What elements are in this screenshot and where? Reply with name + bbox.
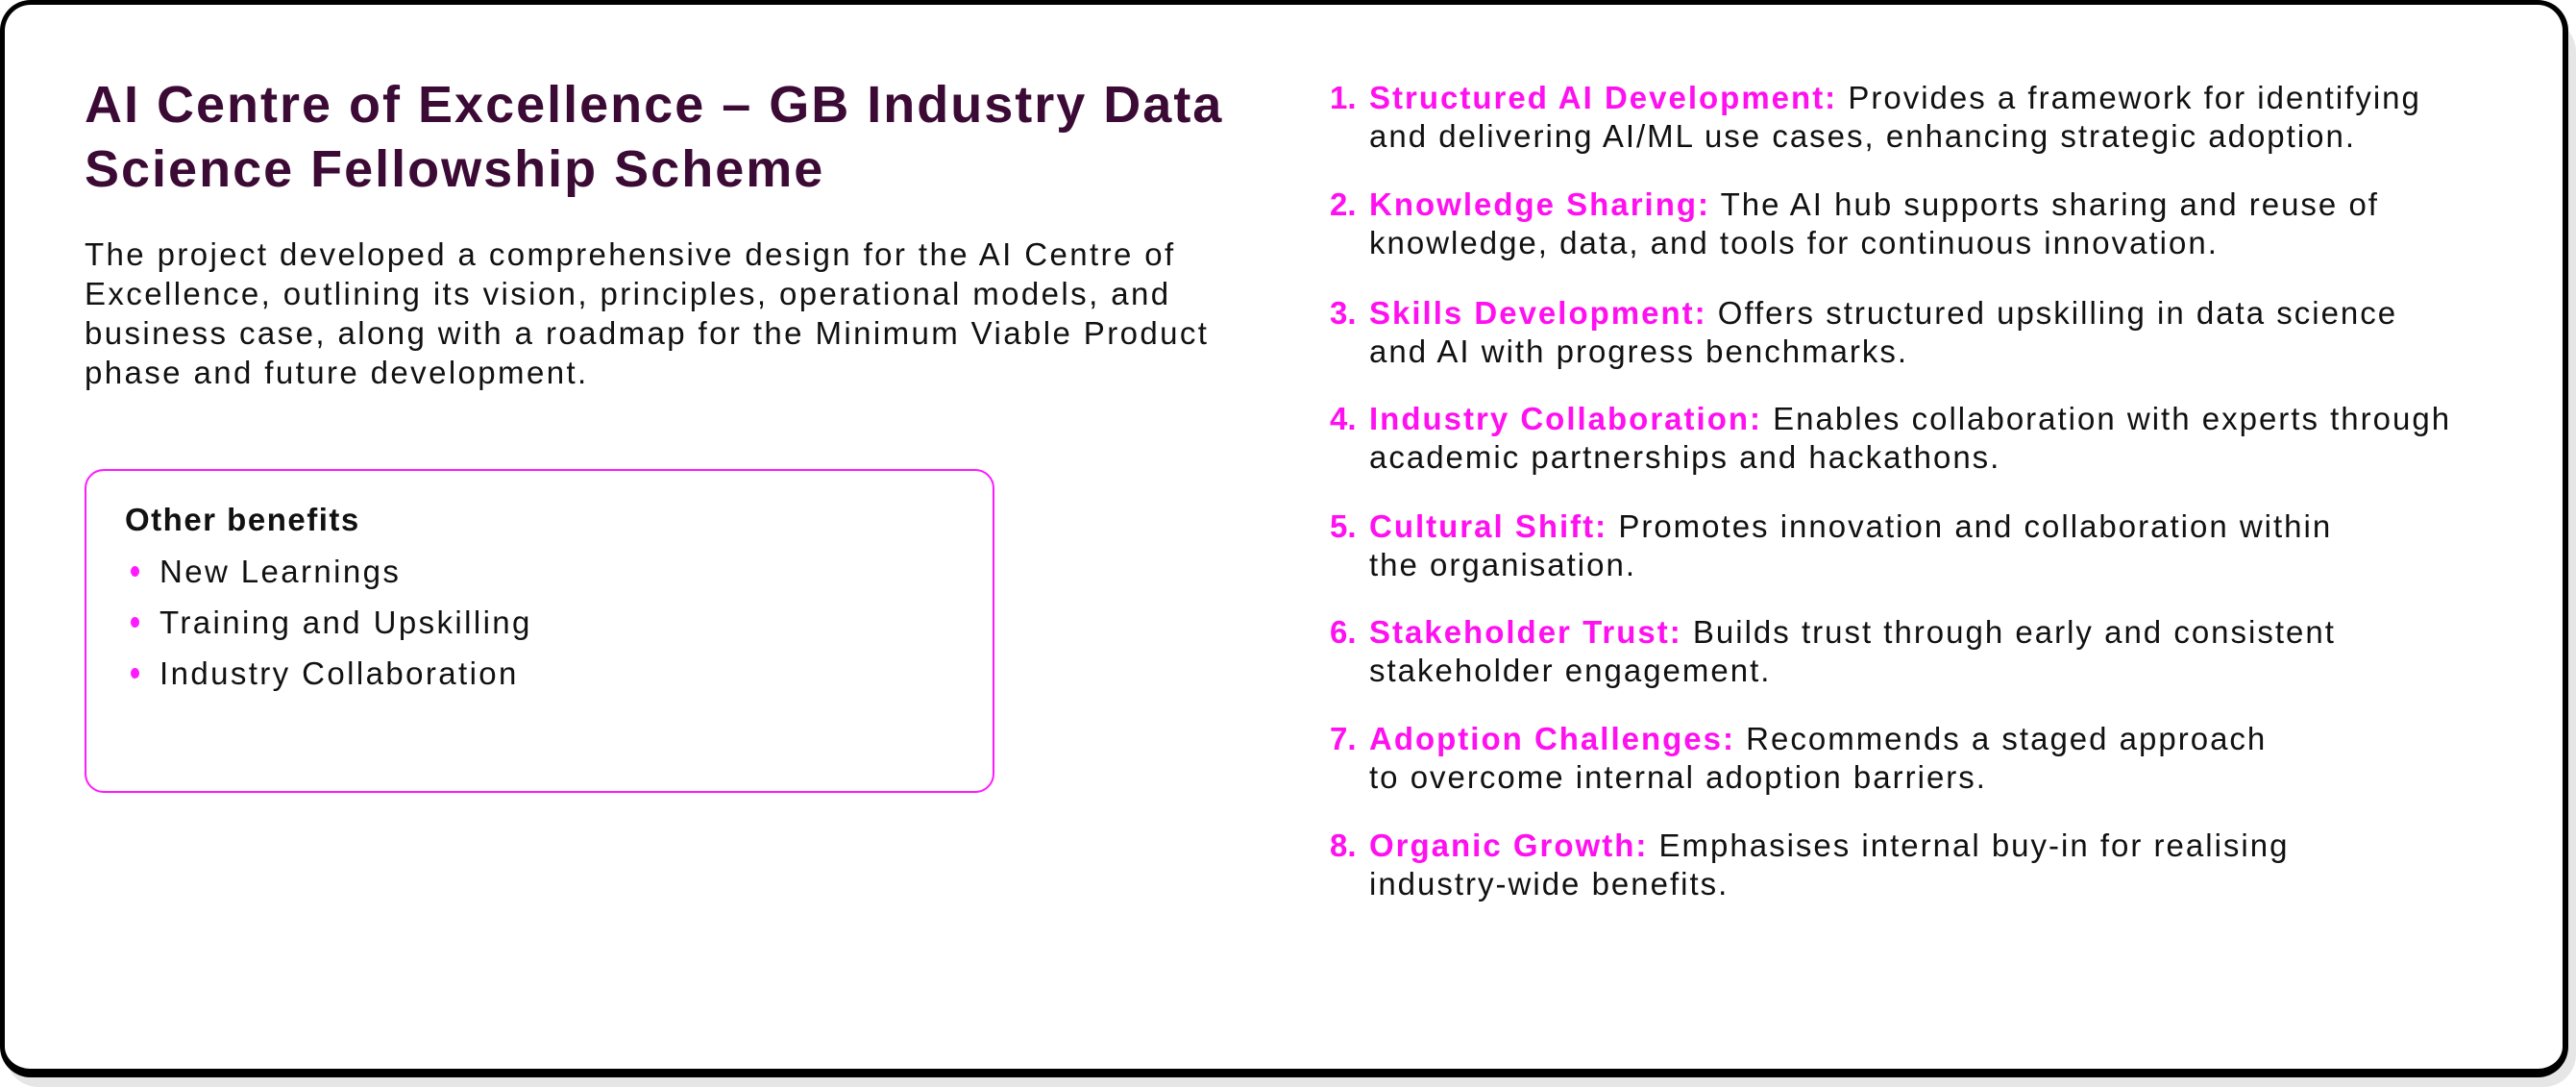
item 7: to overcome internal adoption barriers. [1369, 759, 1987, 795]
item 8: 8. [1330, 828, 1357, 863]
item 6: Stakeholder Trust: Builds trust through early and consistent [1369, 614, 2336, 650]
item 1: 1. [1330, 80, 1357, 115]
item 8 [1330, 828, 2289, 902]
heading: other benefits: Other benefits [125, 502, 360, 537]
item 3: Skills Development: Offers structured upskilling in data science [1369, 295, 2397, 331]
title [85, 76, 1223, 198]
item 5: Cultural Shift: Promotes innovation and collaboration within [1369, 508, 2332, 544]
bullet list: Industry Collaboration [159, 655, 519, 691]
item 7: Adoption Challenges: Recommends a staged approach [1369, 721, 2267, 756]
title: Science Fellowship Scheme [85, 140, 824, 198]
item 5 [1330, 508, 2332, 582]
intro paragraph: The project developed a comprehensive design for the AI Centre of [85, 236, 1176, 272]
bullet list: Training and Upskilling [159, 605, 532, 640]
item 8: Organic Growth: Emphasises internal buy-in for realising [1369, 828, 2289, 863]
item 1 [1330, 80, 2421, 154]
item 2: knowledge, data, and tools for continuous innovation. [1369, 225, 2219, 260]
title: AI Centre of Excellence – GB Industry Data [85, 76, 1223, 134]
item 4: Industry Collaboration: Enables collaboration with experts through [1369, 401, 2451, 436]
item 8: industry-wide benefits. [1369, 866, 1729, 902]
item 6 [1330, 614, 2336, 688]
item 3 [1330, 295, 2397, 369]
item 2: Knowledge Sharing: The AI hub supports sharing and reuse of [1369, 186, 2379, 222]
item 4: 4. [1330, 401, 1357, 436]
bullet list [131, 554, 532, 691]
item 1: and delivering AI/ML use cases, enhancing strategic adoption. [1369, 118, 2356, 154]
intro paragraph: business case, along with a roadmap for the Minimum Viable Product [85, 315, 1209, 351]
item 3: 3. [1330, 295, 1357, 331]
item 7: 7. [1330, 721, 1357, 756]
item 4 [1330, 401, 2451, 475]
item 5: 5. [1330, 508, 1357, 544]
item 3: and AI with progress benchmarks. [1369, 334, 1908, 369]
panel: other benefits [85, 469, 994, 793]
item 6: stakeholder engagement. [1369, 653, 1771, 688]
item 2: 2. [1330, 186, 1357, 222]
intro paragraph: Excellence, outlining its vision, principles, operational models, and [85, 276, 1170, 311]
intro paragraph [85, 236, 1209, 390]
bullet list: New Learnings [159, 554, 401, 589]
intro paragraph: phase and future development. [85, 355, 589, 390]
item 1: Structured AI Development: Provides a framework for identifying [1369, 80, 2421, 115]
item 4: academic partnerships and hackathons. [1369, 439, 2000, 475]
item 7 [1330, 721, 2267, 795]
item 2 [1330, 186, 2379, 260]
item 5: the organisation. [1369, 547, 1636, 582]
item 6: 6. [1330, 614, 1357, 650]
